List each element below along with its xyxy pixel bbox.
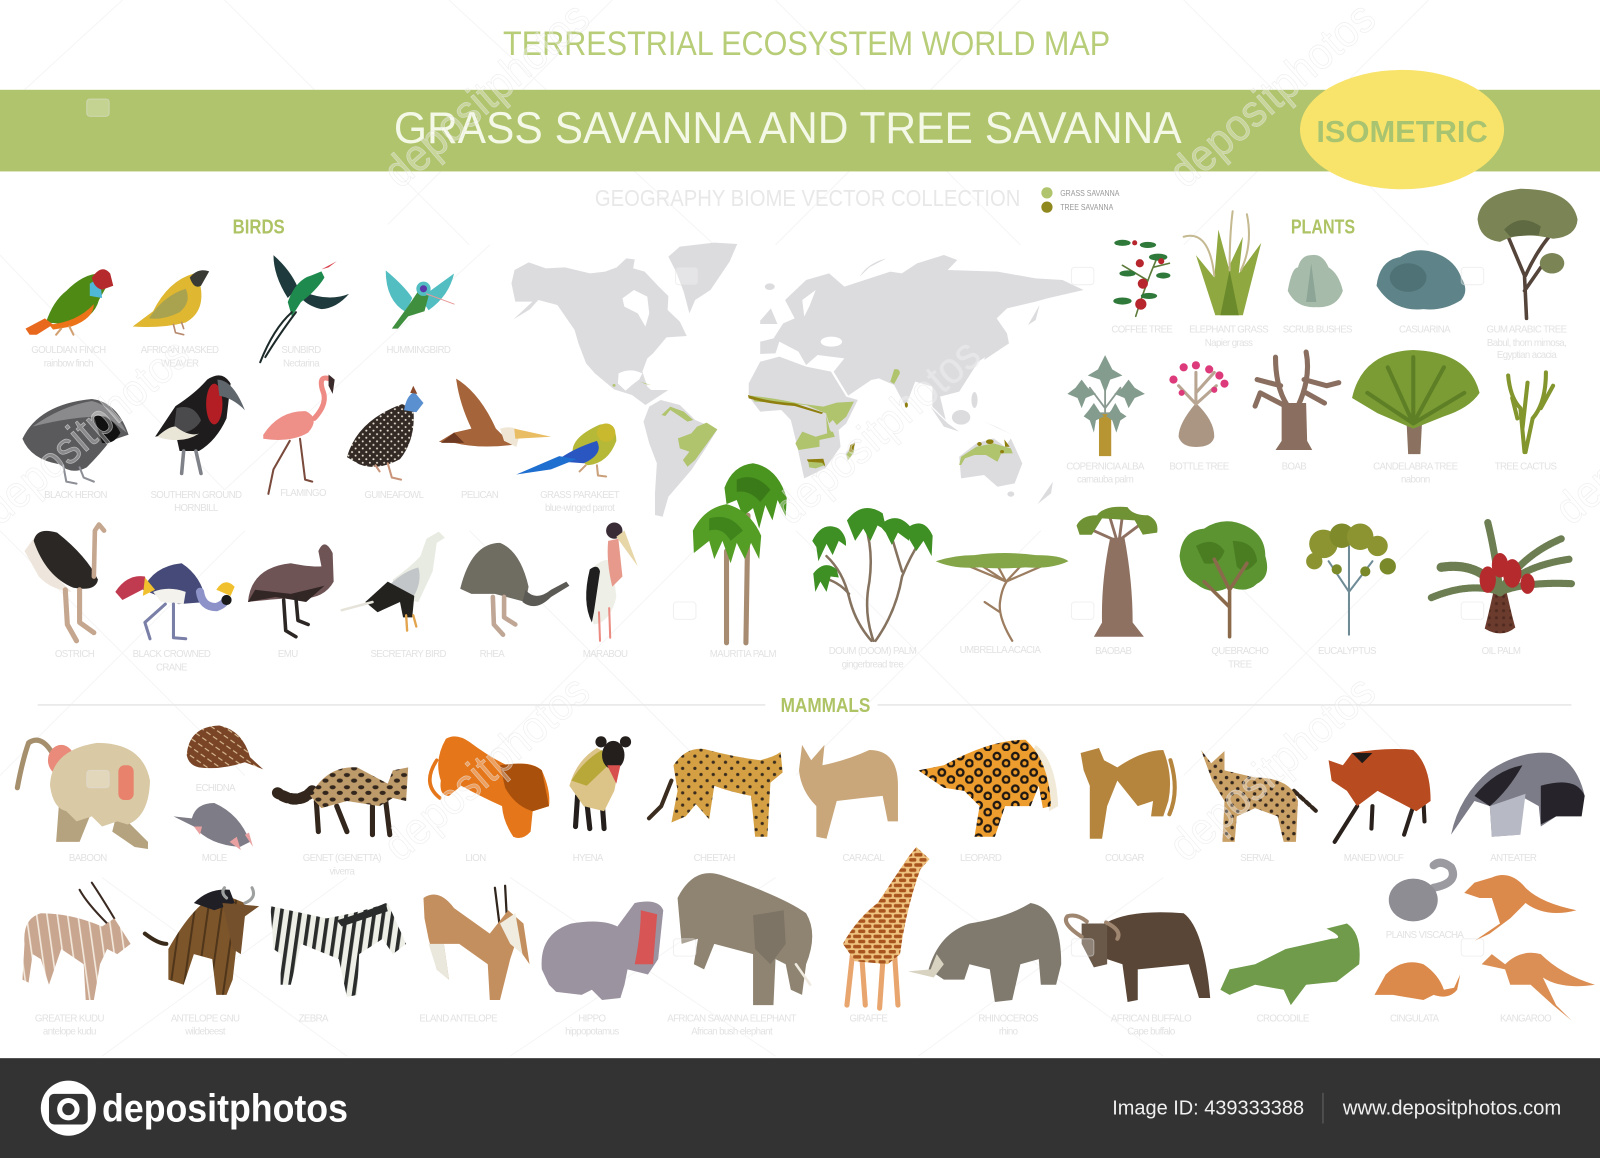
bird: grass parakeet [516,423,620,514]
mammal: caracal [799,745,898,864]
mammal: eland antelope [419,886,530,1024]
mammal: wildebeest: wildebeest [184,1027,226,1038]
panel: plants [693,189,1578,670]
mammal: serval [1201,750,1316,864]
mammal: leopard: LEOPARD [960,853,1002,864]
bird: pelican [439,379,551,501]
depositphotos watermarks: depositphotos [1159,665,1385,871]
bird: sunbird: SUNBIRD [281,345,321,356]
mammal: wildebeest: ANTELOPE GNU [171,1013,240,1024]
bird: black heron [22,399,129,501]
mammal: african elephant [667,873,812,1038]
footer logo [41,1081,348,1136]
subtitle: terrestrial ecosystem world map: TERRESTRIAL ECOSYSTEM WORLD MAP [503,25,1110,63]
mammal: rhinoceros: rhino [999,1027,1018,1038]
mammal: mole [173,803,253,864]
mammal: wildebeest [145,888,259,1038]
bird: secretary bird [342,532,446,660]
tree: mauritia palm [693,463,787,660]
plant: gum arabic tree: Babul, thorn mimosa, [1487,338,1566,349]
mammal: cheetah [649,749,783,864]
isometric badge: ISOMETRIC [1316,115,1488,149]
mammal: kangaroo upper [1464,875,1577,941]
bird: guineafowl [347,386,425,501]
plant: gum arabic tree: GUM ARABIC TREE [1487,325,1568,336]
depositphotos watermarks: depositphotos [764,328,990,534]
tree: baobab [1077,507,1157,657]
mammal: anteater [1451,753,1585,864]
world map [511,243,1084,517]
mammal: genet: GENET (GENETTA) [303,853,381,864]
bird: sunbird: Nectarina [283,358,320,369]
plant: scrub bushes: SCRUB BUSHES [1283,325,1353,336]
bird: black crowned crane [115,563,235,673]
bird: african masked weaver: AFRICAN MASKED [141,345,219,356]
plant: candelabra tree: nabonn [1401,475,1430,486]
mammal: crocodile: CROCODILE [1257,1013,1310,1024]
footer website: www.depositphotos.com [1342,1097,1561,1119]
plant: boab [1255,352,1339,472]
bird: african masked weaver: WEAVER [161,358,199,369]
tree: quebracho: QUEBRACHO [1211,646,1269,657]
birds heading: BIRDS [233,217,285,239]
mammal: anteater: ANTEATER [1490,853,1537,864]
mammal: maned wolf [1329,749,1431,864]
plant: elephant grass: ELEPHANT GRASS [1189,325,1269,336]
plant: elephant grass [1184,211,1269,349]
footer image id: Image ID: 439333388 [1112,1097,1304,1119]
mammal: greater kudu: antelope kudu [43,1027,96,1038]
tree: eucalyptus: EUCALYPTUS [1318,646,1377,657]
tree: umbrella acacia [936,553,1068,656]
mammal: african elephant: African bush elephant [691,1027,773,1038]
mammal: greater kudu [22,883,131,1038]
plant: gum arabic tree: Egyptian acacia [1497,350,1557,361]
plant: gum arabic tree [1478,189,1578,361]
plant: coffee tree: COFFEE TREE [1111,325,1173,336]
bird: southern ground hornbill: HORNBILL [174,503,219,514]
title banner: GRASS SAVANNA AND TREE SAVANNA [394,102,1182,153]
mammal: hippo: hippopotamus [565,1027,619,1038]
tree: oil palm: OIL PALM [1482,646,1521,657]
bird: gouldian finch [26,269,113,369]
mammal: maned wolf: MANED WOLF [1344,853,1404,864]
bird: marabou [583,522,638,660]
mammal: african buffalo [1066,912,1210,1038]
bird: grass parakeet: blue-winged parrot [545,503,615,514]
mammal: genet [278,767,408,877]
plants heading: PLANTS [1291,217,1355,239]
bird: black crowned crane: BLACK CROWNED [133,649,211,660]
tree: mauritia palm: MAURITIA PALM [710,649,776,660]
mammal: lion: LION [465,853,486,864]
bird: marabou: MARABOU [583,649,628,660]
mammal: lion [430,736,549,864]
bird: gouldian finch: rainbow finch [44,358,93,369]
mammal: genet: viverra [329,866,355,877]
bird: guineafowl: GUINEAFOWL [364,490,425,501]
mammal: hippo: HIPPO [578,1013,606,1024]
mammal: serval: SERVAL [1240,853,1275,864]
mammal: plains viscacha [1386,863,1464,941]
plant: casuarina [1377,250,1465,336]
mammal: zebra [270,903,406,1024]
bird: ostrich: OSTRICH [55,649,95,660]
tree: doum palm [812,508,933,670]
plant: copernicia alba: carnauba palm [1077,475,1134,486]
plant: copernicia alba: COPERNICIA ALBA [1066,461,1145,472]
bird: flamingo: FLAMINGO [280,488,327,499]
plant: candelabra tree [1352,350,1480,486]
bird: emu [248,544,334,660]
mammal: zebra: ZEBRA [299,1013,329,1024]
depositphotos watermarks: depositphotos [373,665,599,871]
plant: elephant grass: Napier grass [1205,338,1253,349]
bird: pelican: PELICAN [461,490,499,501]
plant: copernicia alba [1066,355,1145,486]
mammal: cougar [1081,748,1175,864]
tree: quebracho [1180,521,1269,670]
panel: birds [22,255,638,673]
mammal: cheetah: CHEETAH [694,853,736,864]
mammal: kangaroo lower [1482,953,1595,1024]
bird: ostrich [24,524,104,660]
bird: southern ground hornbill [150,375,245,514]
map legend: GRASS SAVANNA [1060,188,1120,198]
mammal: echidna [187,726,263,794]
isometric badge [1300,70,1504,189]
mammal: kangaroo lower: KANGAROO [1500,1013,1552,1024]
mammal: rhinoceros: RHINOCEROS [978,1013,1039,1024]
tree: eucalyptus [1306,523,1396,657]
bird: emu: EMU [278,649,298,660]
map legend [1041,187,1120,213]
plant: candelabra tree: CANDELABRA TREE [1373,461,1459,472]
mammal: leopard [918,740,1058,864]
map legend: TREE SAVANNA [1060,202,1113,212]
mammal: baboon: BABOON [69,853,107,864]
bird: flamingo [263,374,335,499]
plant: tree cactus: TREE CACTUS [1495,461,1557,472]
plant: boab: BOAB [1282,461,1306,472]
mammal: cingulata: CINGULATA [1390,1013,1440,1024]
mammal: echidna: ECHIDNA [196,783,236,794]
bird: rhea: RHEA [480,649,505,660]
panel: mammals [17,726,1595,1038]
mammal: eland antelope: ELAND ANTELOPE [419,1013,498,1024]
mammal: hyena [569,736,631,864]
bird: african masked weaver [133,270,219,369]
tree: oil palm [1431,522,1571,657]
tree: quebracho: TREE [1228,659,1253,670]
mammal: baboon [17,740,150,864]
mammal: african buffalo: AFRICAN BUFFALO [1111,1013,1192,1024]
plant: casuarina: CASUARINA [1399,325,1451,336]
bird: hummingbird [386,270,454,356]
mammal: cougar: COUGAR [1105,853,1145,864]
mammal: rhinoceros [908,903,1061,1038]
bird: black heron: BLACK HERON [44,490,107,501]
footer logo: depositphotos [102,1087,348,1130]
mammal: crocodile [1220,923,1360,1024]
mammal: african buffalo: Cape buffalo [1127,1027,1175,1038]
title banner [0,90,1600,171]
mammal: mole: MOLE [202,853,228,864]
tree: umbrella acacia: UMBRELLA ACACIA [960,645,1042,656]
tree: baobab: BAOBAB [1095,646,1131,657]
plant: scrub bushes [1283,255,1353,336]
mammals heading with rule: MAMMALS [781,695,870,717]
mammal: cingulata [1374,962,1460,1024]
mammal: plains viscacha: PLAINS VISCACHA [1386,930,1464,941]
footer divider [1322,1093,1323,1123]
bird: black crowned crane: CRANE [156,662,188,673]
tree: doum palm: gingerbread tree [842,659,903,670]
bird: rhea [460,543,569,660]
collection subtitle: GEOGRAPHY BIOME VECTOR COLLECTION [595,185,1020,211]
bird: sunbird [260,255,349,369]
mammal: hyena: HYENA [573,853,604,864]
plant: bottle tree [1169,361,1230,472]
bird: grass parakeet: GRASS PARAKEET [540,490,620,501]
mammal: caracal: CARACAL [843,853,885,864]
mammal: giraffe [843,847,930,1024]
footer bar [0,1058,1600,1158]
mammal: giraffe: GIRAFFE [850,1013,888,1024]
bird: hummingbird: HUMMINGBIRD [386,345,451,356]
plant: bottle tree: BOTTLE TREE [1169,461,1230,472]
bird: gouldian finch: GOULDIAN FINCH [31,345,106,356]
mammal: african elephant: AFRICAN SAVANNA ELEPHANT [667,1013,797,1024]
bird: secretary bird: SECRETARY BIRD [370,649,446,660]
plant: tree cactus [1495,372,1557,472]
tree: doum palm: DOUM (DOOM) PALM [829,646,917,657]
mammal: hippo [542,902,663,1038]
bird: southern ground hornbill: SOUTHERN GROUND [150,490,242,501]
mammal: greater kudu: GREATER KUDU [35,1013,104,1024]
plant: coffee tree [1111,240,1173,336]
